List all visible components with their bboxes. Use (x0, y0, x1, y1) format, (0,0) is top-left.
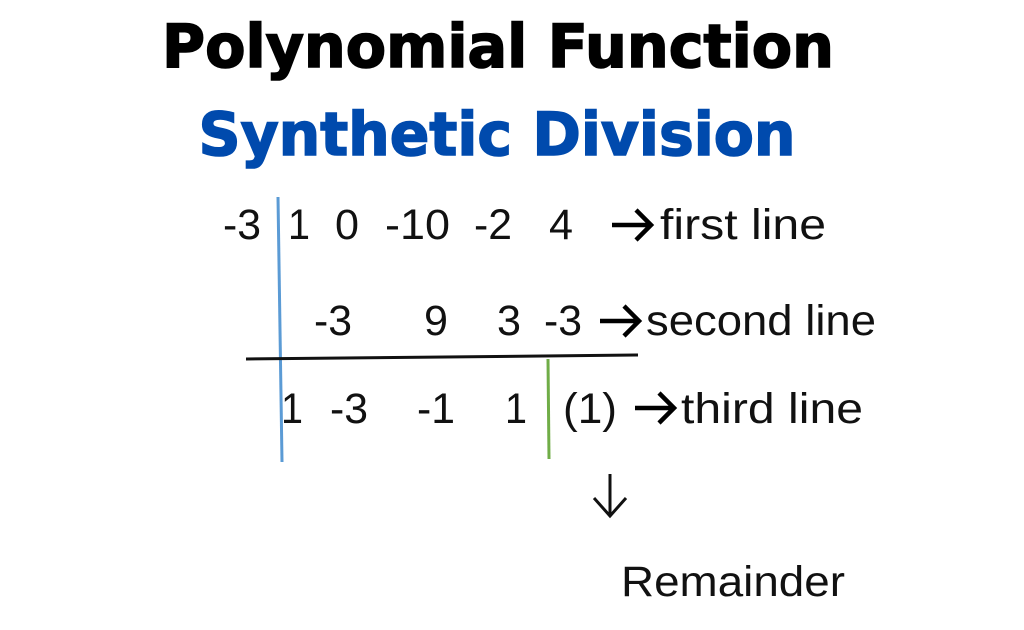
second line of division: 3 (497, 297, 521, 345)
subtitle: Synthetic Division (198, 100, 796, 170)
third line of division: (1) (563, 385, 617, 433)
second line of division: -3 (314, 297, 352, 345)
first line of division: 0 (335, 201, 359, 249)
first line of division: -10 (385, 201, 450, 249)
third line of division: -1 (417, 385, 455, 433)
title: Polynomial Function (162, 12, 834, 82)
third line of division: 1 (505, 385, 527, 433)
second line of division: 9 (424, 297, 448, 345)
third line of division (281, 385, 863, 433)
first line of division: -2 (474, 201, 512, 249)
arrow: first line (612, 210, 651, 240)
first line of division (223, 201, 826, 249)
green remainder divider (548, 359, 549, 459)
arrow: third line (635, 393, 674, 423)
arrow: down to remainder (594, 474, 626, 516)
remainder label: Remainder (621, 558, 845, 606)
first line of division: first line (660, 201, 826, 249)
second line of division (314, 297, 876, 345)
first line of division: 1 (288, 201, 310, 249)
third line of division: third line (681, 385, 863, 433)
second line of division: -3 (544, 297, 582, 345)
arrow: second line (600, 306, 639, 336)
first line of division: 4 (549, 201, 573, 249)
third line of division: -3 (330, 385, 368, 433)
blue vertical divider (278, 197, 282, 462)
second line of division: second line (646, 297, 876, 345)
horizontal sum line (246, 355, 638, 359)
first line of division: -3 (223, 201, 261, 249)
third line of division: 1 (281, 385, 303, 433)
